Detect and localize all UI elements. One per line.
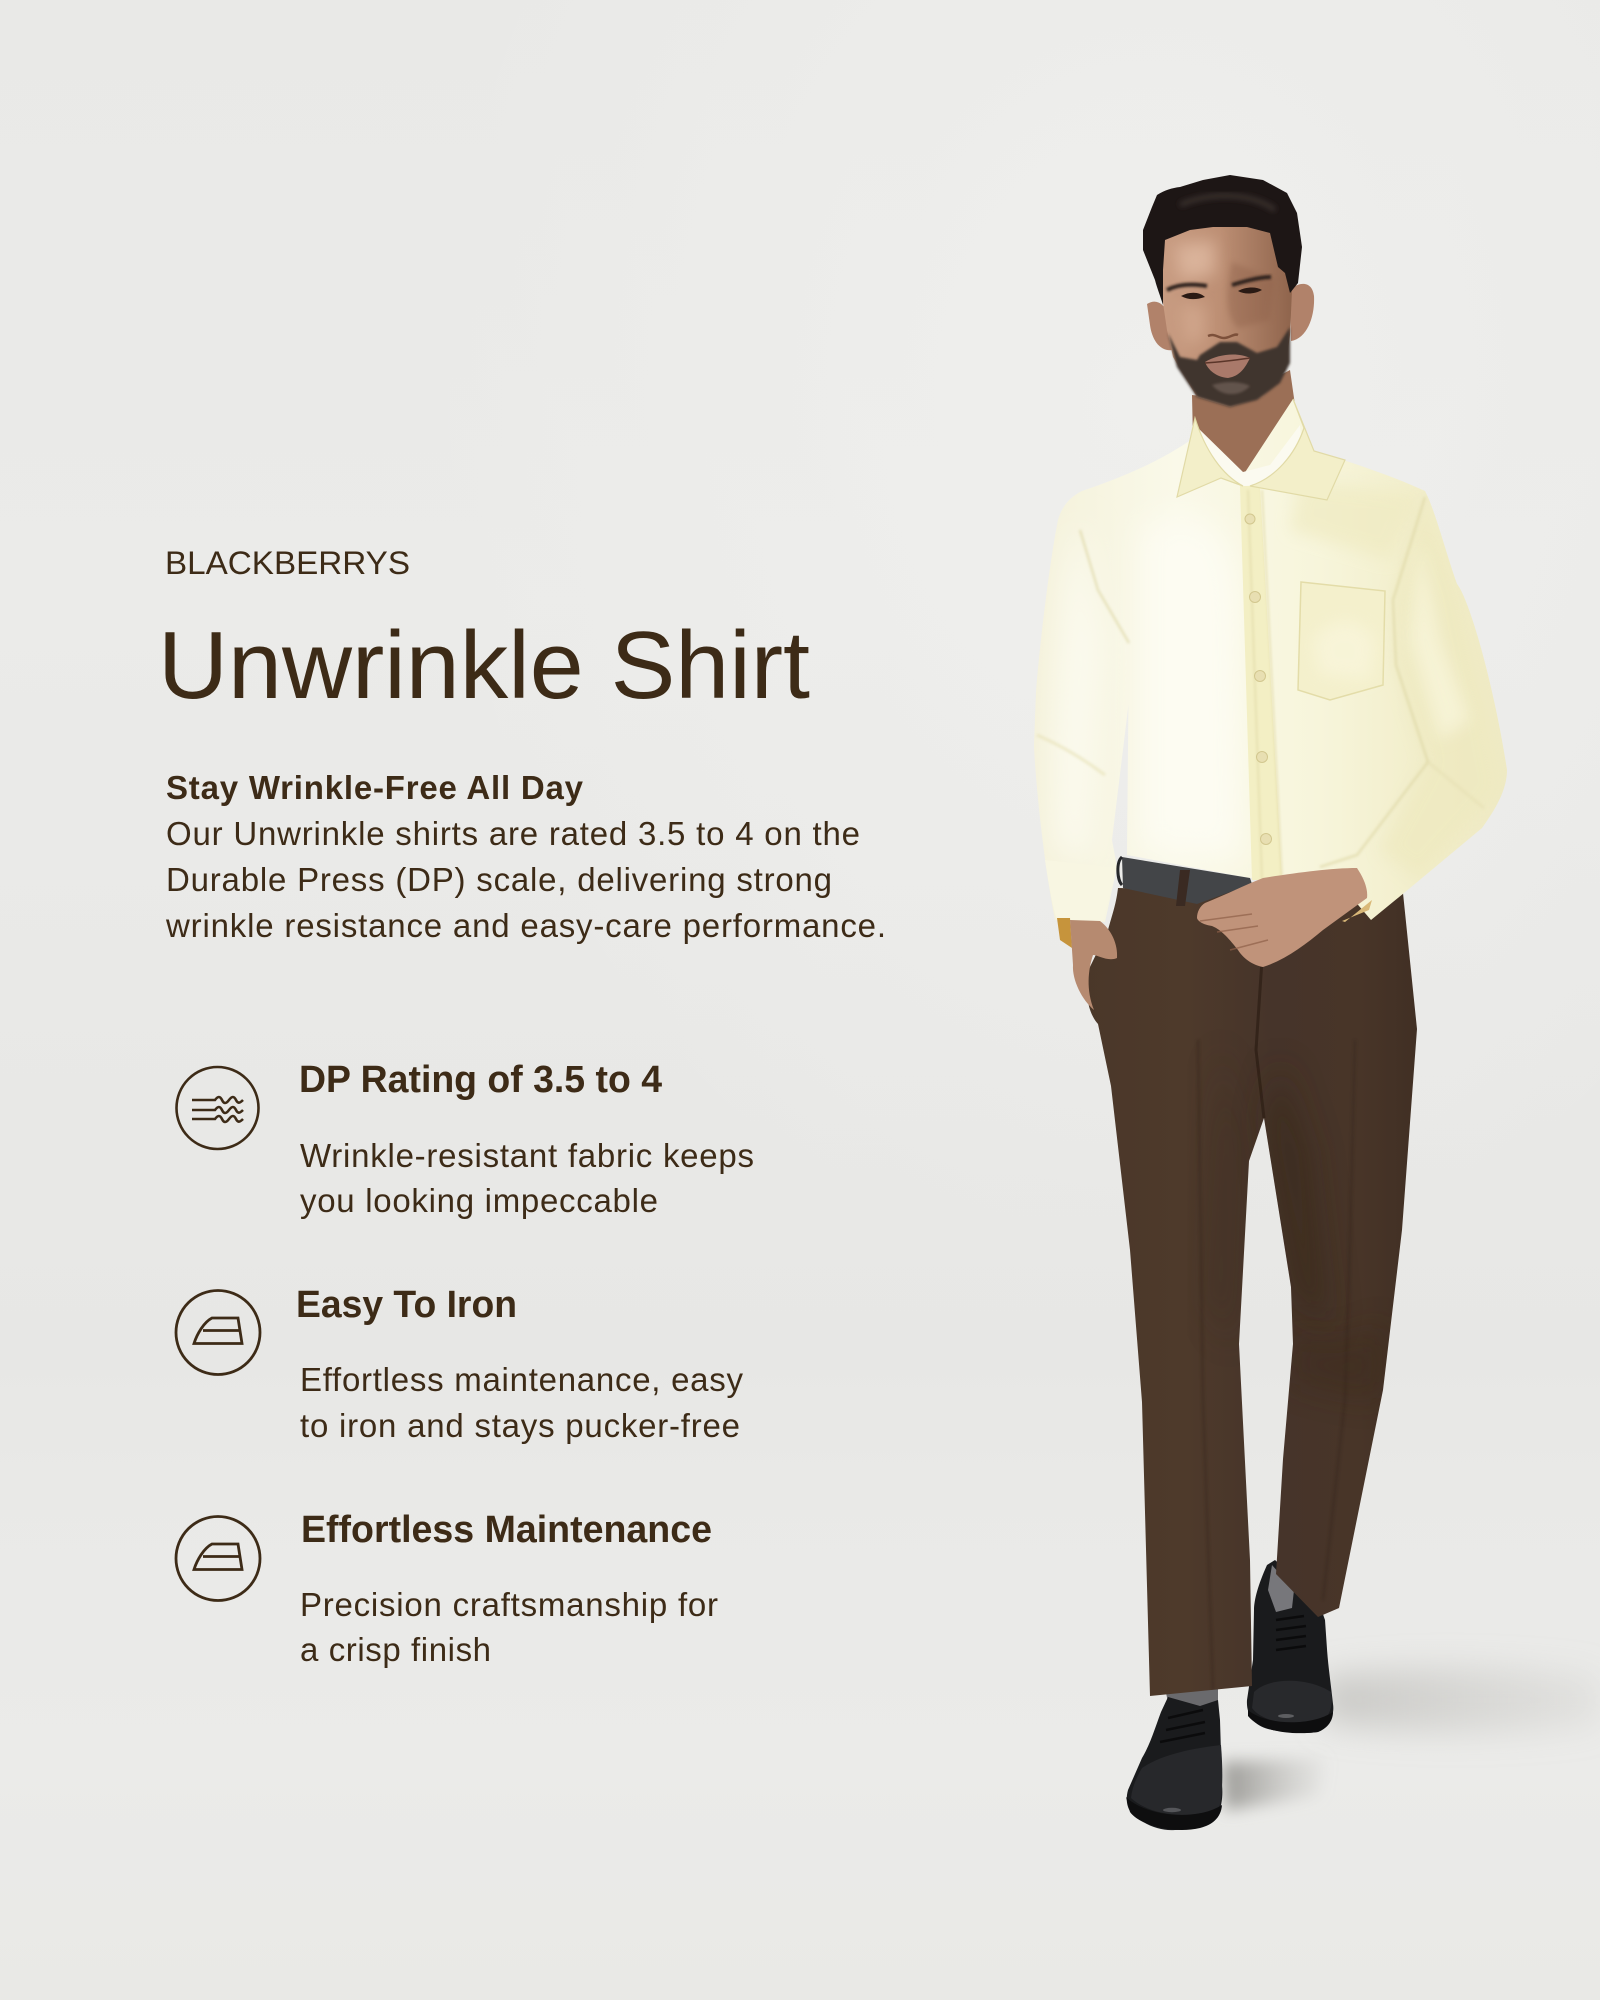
placket: [1240, 486, 1282, 880]
hands: [1070, 868, 1367, 1010]
face: [1160, 215, 1292, 407]
icon: fabric waves: [176, 1067, 258, 1149]
icon: iron: [176, 1516, 260, 1600]
intro text block: [165, 769, 886, 944]
pocket: [1298, 582, 1385, 700]
intro text block: wrinkle resistance and easy-care performance.: [165, 907, 886, 944]
intro text block: Durable Press (DP) scale, delivering strong: [166, 861, 832, 898]
feature heading: Effortless Maintenance: [301, 1509, 712, 1551]
feature description: Precision craftsmanship for: [300, 1586, 718, 1623]
nose shadow: [1227, 262, 1275, 328]
feature description: Effortless maintenance, easy: [300, 1361, 744, 1398]
inner collar: [1196, 425, 1301, 486]
upper chest tone: [1291, 484, 1404, 552]
feature: DP rating: [176, 1059, 754, 1219]
neck: [1192, 370, 1300, 490]
sock: [1268, 1565, 1294, 1612]
feature: easy to iron: [176, 1284, 744, 1444]
right sleeve tone: [1387, 530, 1445, 866]
infographic canvas: [166, 175, 1578, 1830]
feature description: [300, 1137, 754, 1219]
back shoe and sock: [1247, 1560, 1333, 1733]
brows: [1167, 277, 1271, 290]
beard: [1168, 327, 1290, 407]
feature heading: Easy To Iron: [296, 1284, 517, 1326]
head: [1143, 175, 1314, 407]
left cuff: [1045, 860, 1116, 921]
forehead highlight: [1175, 240, 1215, 280]
light torso sheen: [1145, 531, 1241, 851]
right cuff: [1342, 900, 1372, 922]
feature description: you looking impeccable: [300, 1182, 658, 1219]
icon: iron: [176, 1290, 260, 1374]
shirt: [1034, 399, 1507, 948]
title: Unwrinkle Shirt: [158, 612, 810, 719]
feature description: Wrinkle-resistant fabric keeps: [300, 1137, 754, 1174]
hair: [1143, 175, 1302, 305]
model photo illustration: [1034, 175, 1600, 1830]
trousers: [1080, 880, 1430, 1700]
brand name: BLACKBERRYS: [165, 545, 410, 581]
feature description: [300, 1586, 718, 1668]
buttons: [1245, 514, 1272, 844]
floor shadows: [1222, 1668, 1600, 1810]
collar: [1177, 399, 1345, 500]
feature heading: DP Rating of 3.5 to 4: [299, 1059, 662, 1101]
belt: [1118, 857, 1252, 906]
feature: effortless maintenance: [176, 1509, 718, 1668]
nose: [1208, 335, 1238, 338]
intro text block: Our Unwrinkle shirts are rated 3.5 to 4 on the: [166, 815, 860, 852]
feature description: a crisp finish: [300, 1631, 491, 1668]
ears: [1147, 284, 1314, 350]
feature description: [300, 1361, 744, 1444]
intro text block: Stay Wrinkle-Free All Day: [166, 769, 584, 806]
sleeve seams: [1080, 497, 1428, 867]
feature description: to iron and stays pucker-free: [300, 1407, 740, 1444]
eyes: [1181, 287, 1262, 299]
front shoe and sock: [1126, 1688, 1222, 1830]
